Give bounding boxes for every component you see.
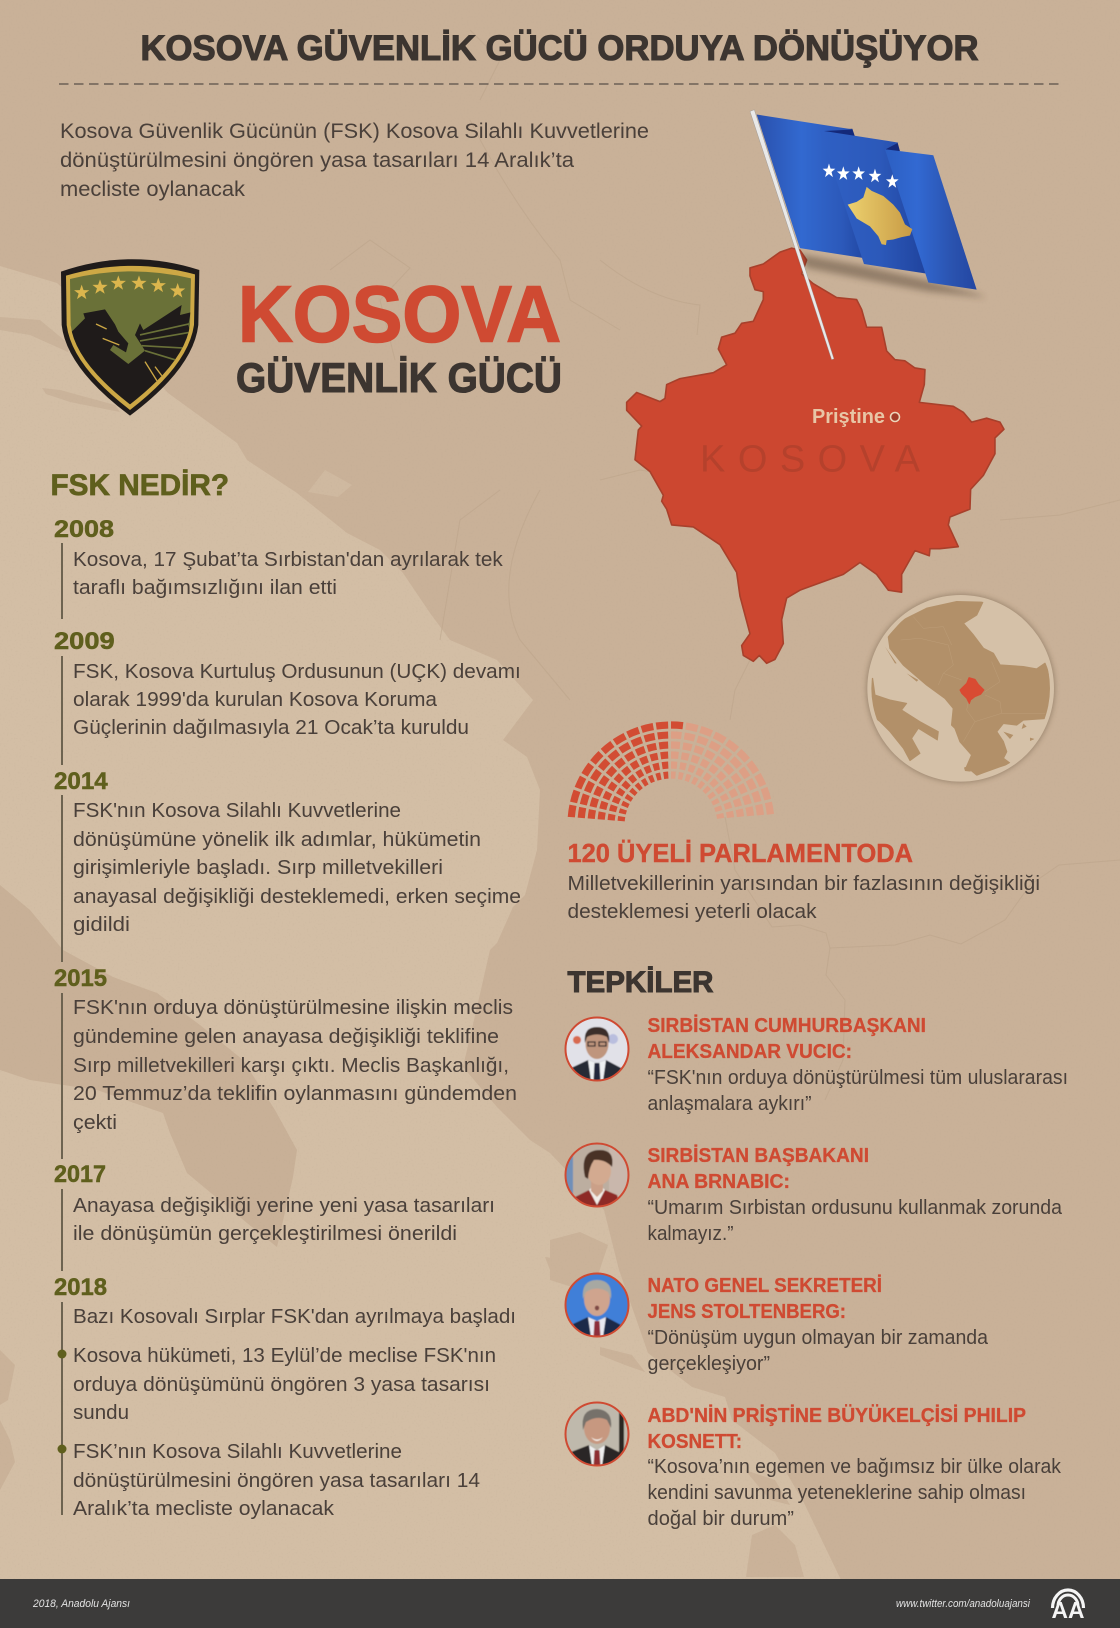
timeline entry: 2008: Kosova, 17 Şubat’ta Sırbistan'dan ayrılarak tek xyxy=(73,549,504,571)
inset locator globe xyxy=(863,594,1055,782)
timeline entry: 2018: dönüştürülmesini öngören yasa tasarıları 14 xyxy=(73,1470,480,1492)
timeline entry: 2018: Bazı Kosovalı Sırplar FSK'dan ayrılmaya başladı xyxy=(73,1306,516,1328)
reaction: Brnabic: kalmayız.” xyxy=(648,1223,734,1245)
reaction: Kosnett: “Kosova’nın egemen ve bağımsız bir ülke olarak xyxy=(648,1456,1062,1478)
reaction: Brnabic: “Umarım Sırbistan ordusunu kullanmak zorunda xyxy=(648,1197,1063,1219)
timeline xyxy=(54,516,521,1520)
portrait: Vucic xyxy=(565,1017,629,1081)
title: KOSOVA GÜVENLİK GÜCÜ ORDUYA DÖNÜŞÜYOR xyxy=(140,29,978,68)
timeline entry: 2018: orduya dönüşümünü öngören 3 yasa tasarısı xyxy=(73,1374,490,1396)
parliament text xyxy=(568,839,1040,923)
timeline entry: 2015: 2015 xyxy=(54,965,107,992)
timeline entry: 2015: Sırp milletvekilleri karşı çıktı. Meclis Başkanlığı, xyxy=(73,1055,509,1077)
reaction: Vucic: SIRBİSTAN CUMHURBAŞKANI xyxy=(648,1014,926,1037)
reaction: Kosnett: kendini savunma yeteneklerine sahip olması xyxy=(648,1482,1026,1504)
map: Kosova with flag xyxy=(627,110,1004,663)
timeline entry: 2009: Güçlerinin dağılmasıyla 21 Ocak’ta kuruldu xyxy=(73,717,469,739)
timeline entry: 2009: olarak 1999'da kurulan Kosova Koruma xyxy=(73,689,438,711)
reaction: Kosnett: ABD'NİN PRİŞTİNE BÜYÜKELÇİSİ PHILIP xyxy=(648,1404,1026,1427)
reaction: Vucic xyxy=(565,1014,1068,1115)
intro text: Kosova Güvenlik Gücünün (FSK) Kosova Silahlı Kuvvetlerine xyxy=(60,120,649,143)
heading: Tepkiler: TEPKİLER xyxy=(568,966,714,999)
footer: www.twitter.com/anadoluajansi xyxy=(896,1598,1030,1610)
intro text: mecliste oylanacak xyxy=(60,178,246,201)
timeline entry: 2008: 2008 xyxy=(54,516,114,543)
reaction: Vucic: ALEKSANDAR VUCIC: xyxy=(648,1040,852,1063)
timeline entry: 2014: anayasal değişikliği desteklemedi, erken seçime xyxy=(73,886,521,908)
timeline entry: 2018: Kosova hükümeti, 13 Eylül’de meclise FSK'nın xyxy=(73,1345,496,1367)
icon: Anadolu Agency logo: AA xyxy=(1052,1597,1084,1623)
reaction: Stoltenberg: “Dönüşüm uygun olmayan bir zamanda xyxy=(648,1327,989,1349)
timeline entry: 2018: sundu xyxy=(73,1402,129,1424)
timeline entry: 2009: FSK, Kosova Kurtuluş Ordusunun (UÇK) devamı xyxy=(73,661,521,683)
reaction: Stoltenberg: gerçekleşiyor” xyxy=(648,1353,770,1375)
heading: Kosova: KOSOVA xyxy=(238,270,561,358)
footer xyxy=(0,1579,1120,1628)
timeline entry: 2009 xyxy=(54,628,521,765)
timeline entry: 2014: dönüşümüne yönelik ilk adımlar, hükümetin xyxy=(73,829,481,851)
reaction: Kosnett xyxy=(565,1402,1062,1530)
reaction: Vucic: “FSK'nın orduya dönüştürülmesi tüm uluslararası xyxy=(648,1067,1068,1089)
timeline entry: 2018: FSK’nın Kosova Silahlı Kuvvetlerine xyxy=(73,1441,402,1463)
flag xyxy=(750,110,977,360)
reaction: Stoltenberg xyxy=(565,1273,989,1375)
timeline entry: 2014: girişimleriyle başladı. Sırp milletvekilleri xyxy=(73,857,443,879)
portrait: Brnabic xyxy=(565,1143,629,1207)
footer: 2018, Anadolu Ajansı xyxy=(32,1598,130,1610)
parliament text: desteklemesi yeterli olacak xyxy=(568,901,818,923)
timeline entry: 2014 xyxy=(54,768,521,962)
timeline entry: 2017 xyxy=(54,1161,495,1271)
reaction: Vucic: anlaşmalara aykırı” xyxy=(648,1093,812,1115)
reaction: Kosnett: KOSNETT: xyxy=(648,1430,742,1453)
timeline entry: 2008 xyxy=(54,516,504,619)
timeline entry: 2017: 2017 xyxy=(54,1161,106,1188)
label: Priştine: Priştine xyxy=(812,406,885,428)
timeline entry: 2018: Aralık’ta mecliste oylanacak xyxy=(73,1498,335,1520)
label: KOSOVA: KOSOVA xyxy=(700,438,921,480)
timeline entry: 2014: gidildi xyxy=(73,914,130,936)
heading: FSK Nedir: FSK NEDİR? xyxy=(50,469,229,502)
timeline entry: 2018 xyxy=(54,1274,516,1520)
timeline entry: 2015: 20 Temmuz’da teklifin oylanmasını gündemden xyxy=(73,1083,517,1105)
timeline entry: 2008: taraflı bağımsızlığını ilan etti xyxy=(73,577,337,599)
timeline entry: 2014: 2014 xyxy=(54,768,108,795)
heading: Güvenlik Gücü: GÜVENLİK GÜCÜ xyxy=(236,354,562,401)
intro text: dönüştürülmesini öngören yasa tasarıları 14 Aralık’ta xyxy=(60,149,574,172)
reaction: Kosnett: doğal bir durum” xyxy=(648,1508,794,1530)
chart: parliament seats xyxy=(571,725,771,821)
timeline entry: 2017: Anayasa değişikliği yerine yeni yasa tasarıları xyxy=(73,1195,495,1217)
timeline entry: 2015: çekti xyxy=(73,1112,117,1134)
parliament text: Milletvekillerinin yarısından bir fazlasının değişikliği xyxy=(568,873,1040,895)
reaction: Stoltenberg: NATO GENEL SEKRETERİ xyxy=(648,1274,882,1297)
reaction: Brnabic xyxy=(565,1143,1063,1245)
timeline entry: 2018: 2018 xyxy=(54,1274,107,1301)
icon: FSK shield emblem xyxy=(60,255,203,416)
timeline entry: 2009: 2009 xyxy=(54,628,115,655)
timeline entry: 2015 xyxy=(54,965,517,1159)
map shape xyxy=(627,248,1004,663)
flag shadow xyxy=(800,254,987,298)
portrait: Stoltenberg xyxy=(565,1273,629,1337)
reaction: Stoltenberg: JENS STOLTENBERG: xyxy=(648,1300,846,1323)
timeline entry: 2017: ile dönüşümün gerçekleştirilmesi önerildi xyxy=(73,1223,457,1245)
portrait: Kosnett xyxy=(565,1402,629,1466)
timeline entry: 2015: FSK'nın orduya dönüştürülmesine ilişkin meclis xyxy=(73,997,513,1019)
parliament text: 120 ÜYELİ PARLAMENTODA xyxy=(568,839,913,868)
timeline entry: 2014: FSK'nın Kosova Silahlı Kuvvetlerine xyxy=(73,800,401,822)
reaction: Brnabic: SIRBİSTAN BAŞBAKANI xyxy=(648,1144,869,1167)
timeline entry: 2015: gündemine gelen anayasa değişikliği teklifine xyxy=(73,1026,499,1048)
intro text xyxy=(60,120,649,201)
reaction: Brnabic: ANA BRNABIC: xyxy=(648,1170,790,1193)
